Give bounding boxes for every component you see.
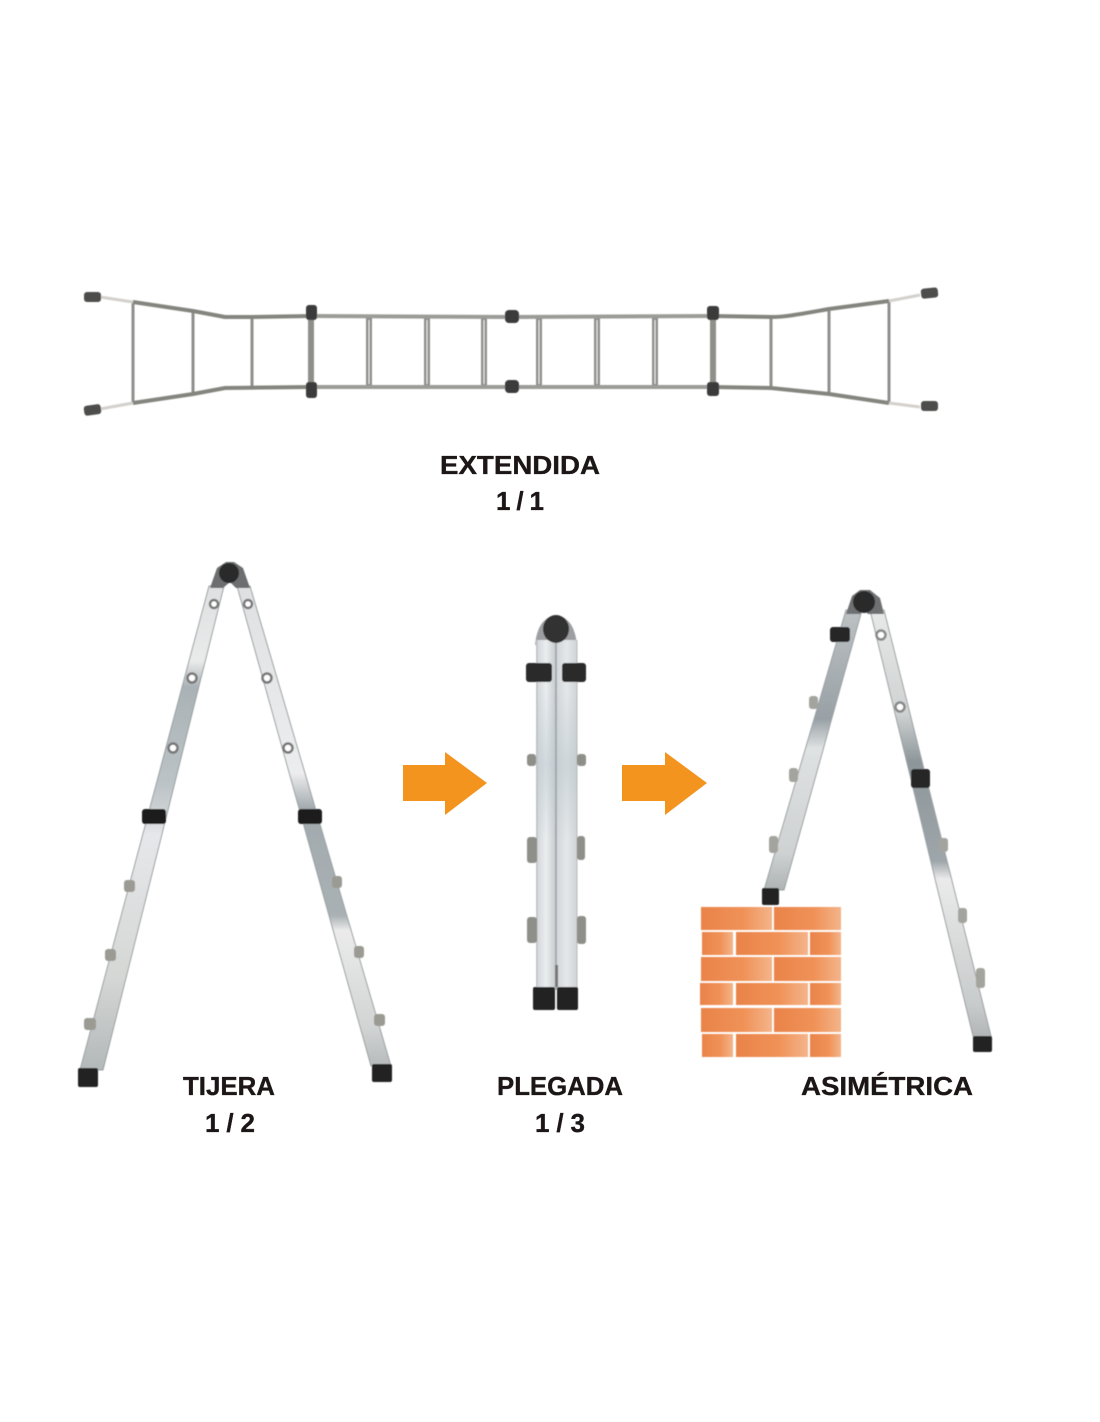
- top cap: [543, 615, 569, 643]
- arrow: scissor to folded: [403, 752, 487, 815]
- label: extendida: [440, 450, 600, 516]
- rails: [100, 295, 920, 409]
- folded ladder: [526, 615, 586, 1010]
- label: asimetrica: ASIMÉTRICA: [801, 1071, 973, 1101]
- locks: [526, 663, 586, 682]
- left leg: [78, 586, 224, 1087]
- arrow: folded to asymmetric: [622, 752, 707, 815]
- label: extendida: 1/1: [496, 486, 544, 516]
- label: plegada: PLEGADA: [497, 1071, 623, 1101]
- extended ladder: [83, 287, 938, 416]
- right leg: [237, 586, 392, 1082]
- scissor ladder: [78, 562, 392, 1087]
- end caps: [83, 287, 938, 416]
- rungs: [133, 302, 889, 403]
- label: tijera: TIJERA: [183, 1071, 275, 1101]
- brick wall: [700, 907, 841, 1057]
- top hinge: [210, 562, 250, 588]
- label: plegada: [497, 1071, 623, 1138]
- pegs: [527, 754, 586, 944]
- left leg: [762, 610, 862, 905]
- label: tijera: [183, 1071, 275, 1138]
- label: tijera: 1/2: [205, 1108, 255, 1138]
- hinges: [306, 305, 719, 398]
- label: extendida: EXTENDIDA: [440, 450, 600, 480]
- asymmetric ladder: [762, 590, 992, 1052]
- top hinge: [846, 590, 884, 614]
- label: plegada: 1/3: [535, 1108, 585, 1138]
- body: [535, 616, 577, 990]
- right leg: [870, 610, 992, 1052]
- feet: [533, 987, 578, 1010]
